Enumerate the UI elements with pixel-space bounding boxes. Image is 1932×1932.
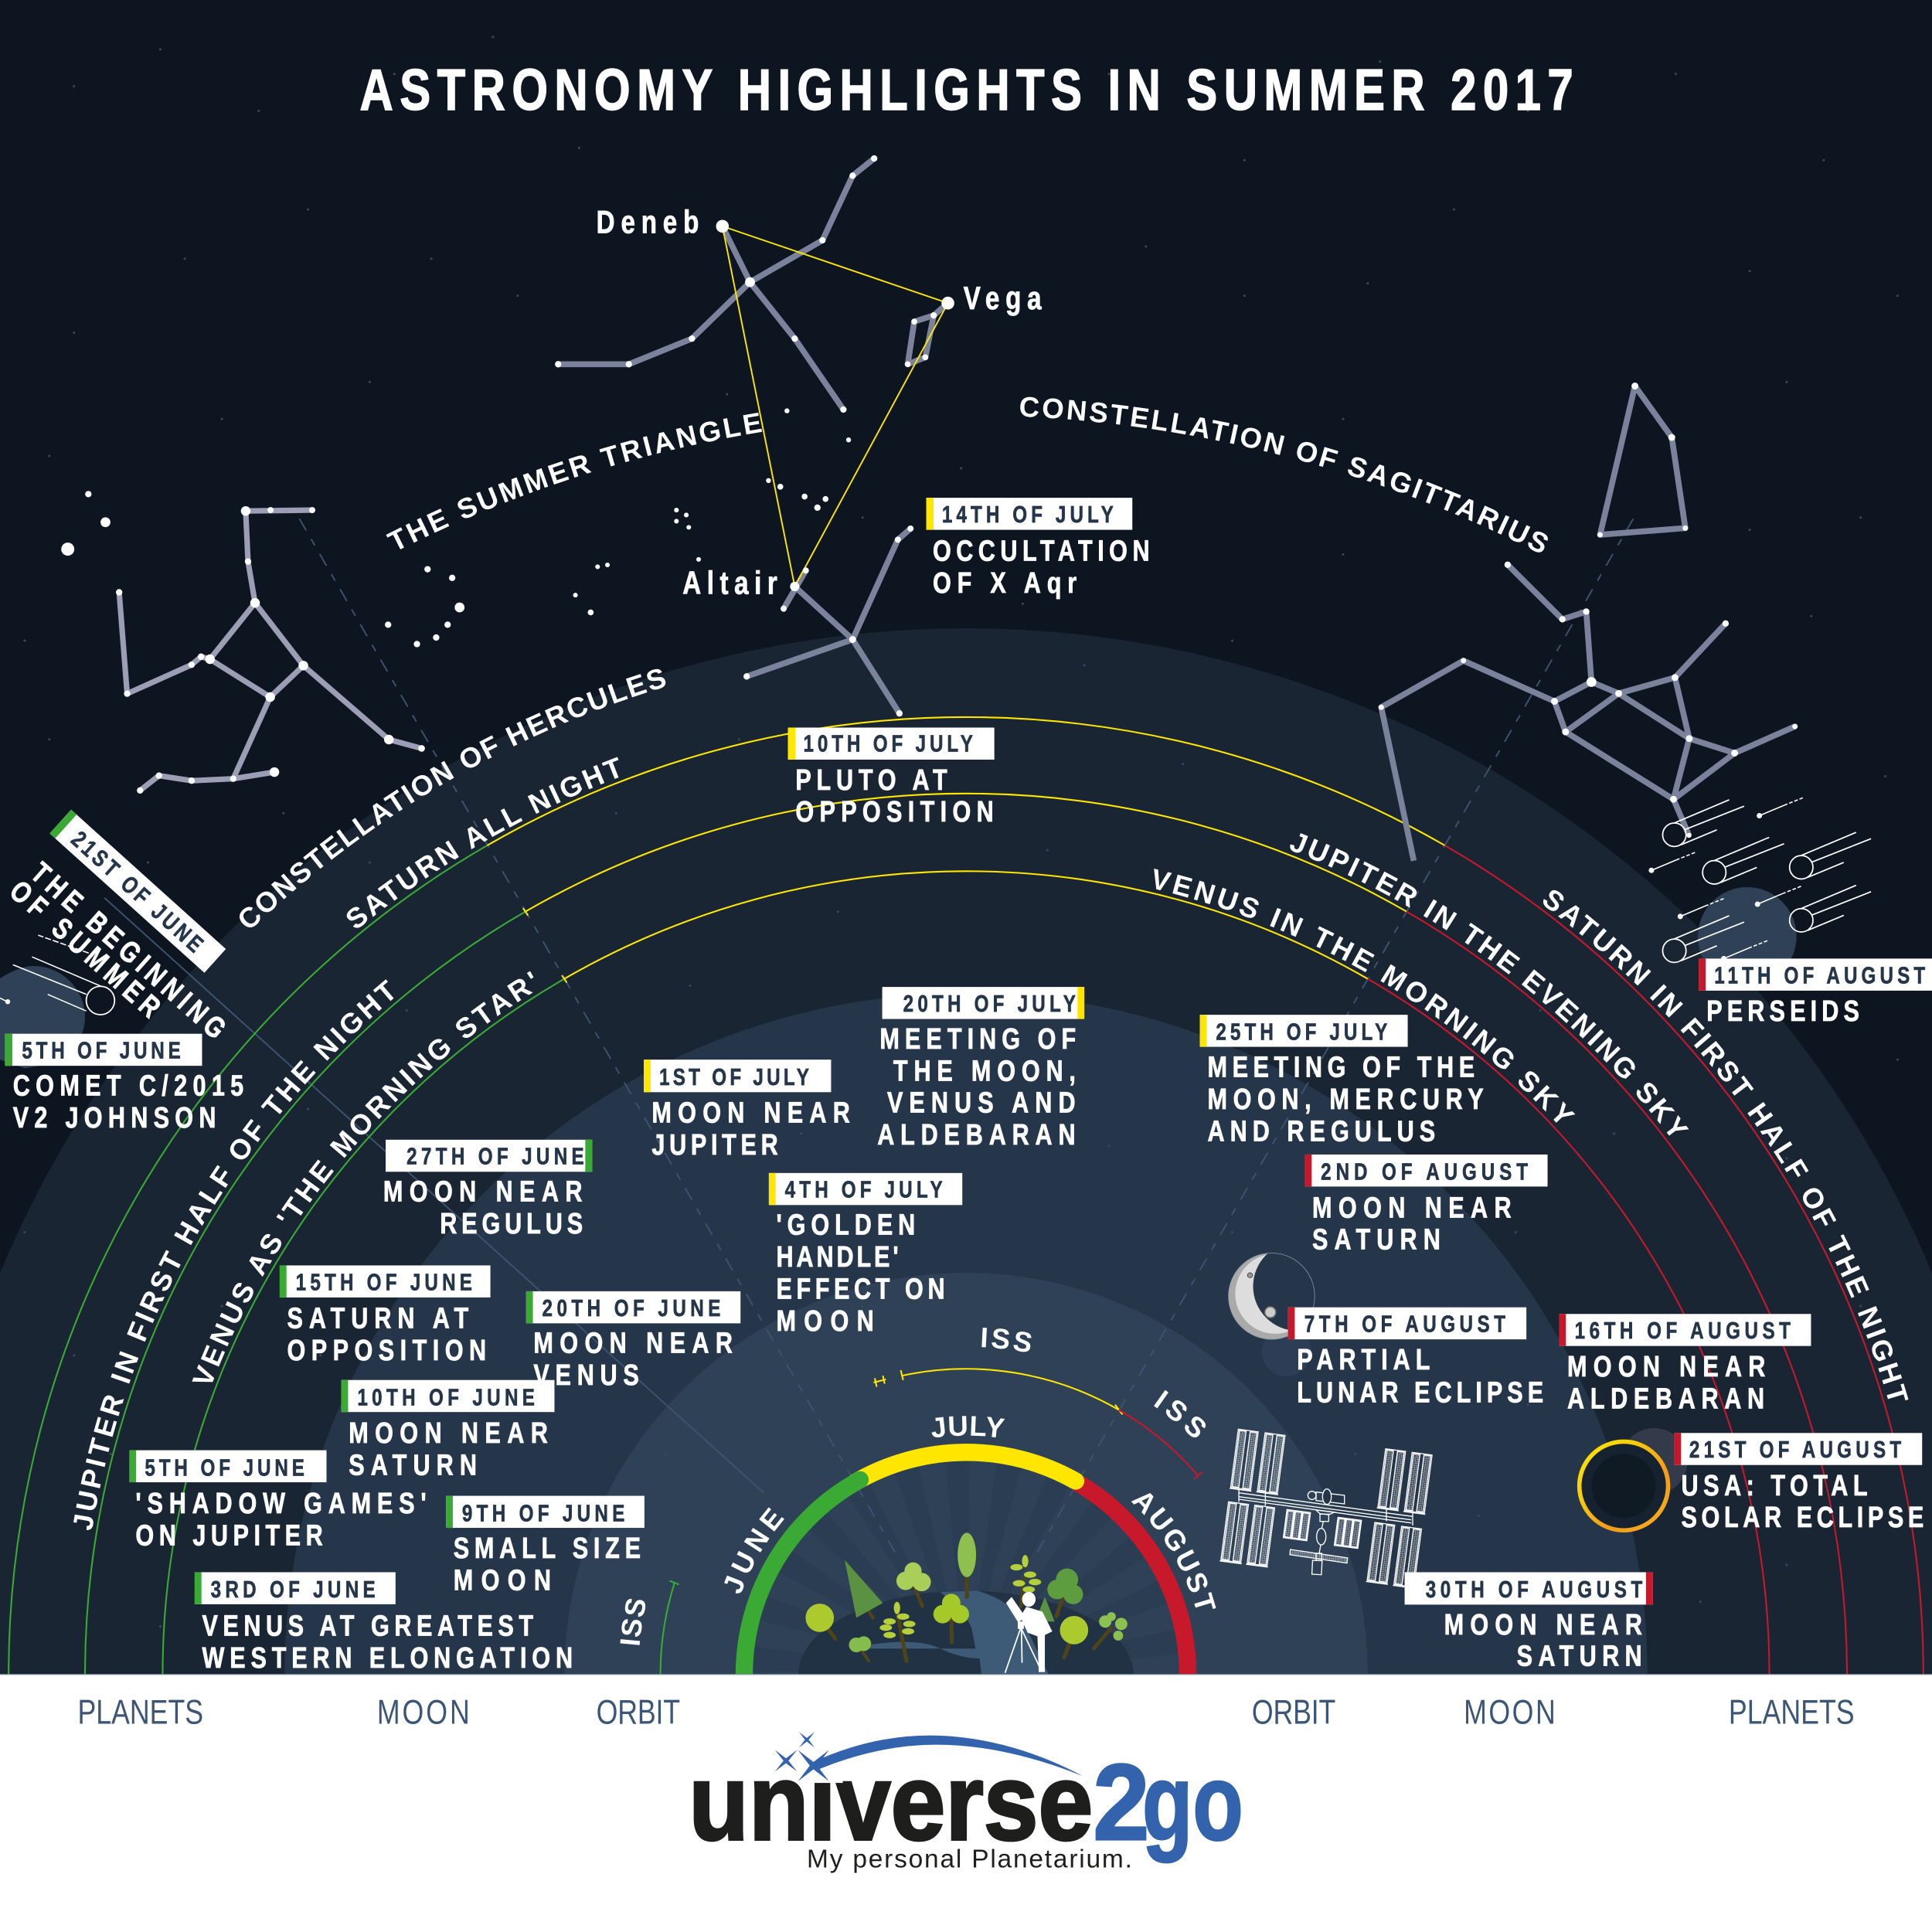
event: 2nd of August: 2ND OF AUGUST — [1321, 1158, 1528, 1185]
event: 20th of July: THE MOON, — [893, 1055, 1076, 1087]
event: 21st of August: SOLAR ECLIPSE — [1682, 1502, 1923, 1534]
event: 10th of June: 10TH OF JUNE — [357, 1384, 535, 1410]
event: 4th of July: 'GOLDEN — [776, 1209, 915, 1241]
International Space Station — [1219, 1429, 1433, 1588]
event: 5th of June Jupiter: 5TH OF JUNE — [145, 1454, 304, 1481]
event: 5th of June comet: COMET C/2015 — [13, 1070, 243, 1102]
event: 4th of July: MOON — [776, 1305, 874, 1338]
ISS orbit track — [661, 1369, 1202, 1675]
month label: June: JUNE — [724, 1507, 784, 1594]
event: 10th of June — [342, 1380, 554, 1481]
event: 9th of June: SMALL SIZE — [454, 1532, 641, 1565]
lunar eclipse moon — [1229, 1242, 1342, 1376]
curved label: Saturn all night: SATURN ALL NIGHT — [346, 757, 618, 928]
comet C/2015 illustration — [0, 935, 114, 1068]
event: 21st of August: USA: TOTAL — [1682, 1470, 1868, 1502]
event: 10th of June: MOON NEAR — [349, 1417, 548, 1450]
event: 15th of June: 15TH OF JUNE — [296, 1269, 472, 1295]
event: 25th of July: AND REGULUS — [1208, 1115, 1435, 1148]
event: 7th of August: LUNAR ECLIPSE — [1297, 1376, 1543, 1409]
event: 1st of July — [644, 1060, 850, 1162]
event: 7th of August — [1288, 1308, 1543, 1409]
curved heading: constellation of Sagittarius: CONSTELLATION OF SAGITTARIUS — [1020, 397, 1548, 553]
event: 3rd of June: VENUS AT GREATEST — [202, 1610, 533, 1642]
event: 10th of July: 10TH OF JULY — [804, 730, 973, 757]
event: 30th of August: MOON NEAR — [1444, 1609, 1642, 1641]
constellation: Hercules — [61, 491, 464, 794]
event: 20th of June — [526, 1291, 740, 1392]
white footer panel — [0, 1675, 1932, 1932]
event: 15th of June: SATURN AT — [287, 1303, 468, 1335]
star label: Vega: Vega — [964, 281, 1043, 316]
axis label: orbit right: ORBIT — [1252, 1692, 1335, 1731]
event: 3rd of June — [195, 1572, 573, 1675]
event: 30th of August: 30TH OF AUGUST — [1426, 1576, 1643, 1602]
axis label: planets right: PLANETS — [1729, 1692, 1855, 1731]
event: 9th of June: 9TH OF JUNE — [462, 1500, 624, 1526]
event: 5th of June Jupiter: 'SHADOW GAMES' — [135, 1488, 427, 1520]
event: 21st of June: THE BEGINNING — [24, 856, 232, 1046]
event: 1st of July: MOON NEAR — [651, 1097, 850, 1129]
event: 16th of August: MOON NEAR — [1567, 1351, 1765, 1383]
curved label: Venus in the morning sky: VENUS IN THE MORNING SKY — [1154, 869, 1575, 1123]
event: 25th of July: 25TH OF JULY — [1216, 1019, 1387, 1045]
event: 21st of June: OF SUMMER — [3, 875, 166, 1024]
event: 20th of June: 20TH OF JUNE — [543, 1294, 720, 1321]
event: 10th of July: OPPOSITION — [795, 796, 994, 828]
event: 21st of June: 21ST OF JUNE — [66, 825, 209, 957]
event: 3rd of June: WESTERN ELONGATION — [202, 1642, 573, 1675]
event: 9th of June — [446, 1496, 645, 1597]
event: 16th of August: 16TH OF AUGUST — [1575, 1317, 1791, 1344]
event: 11th of August: PERSEIDS — [1706, 995, 1859, 1028]
event: 16th of August — [1560, 1314, 1811, 1415]
landscape with trees and observer — [798, 1532, 1134, 1758]
logo: universe2go: go — [1142, 1741, 1243, 1862]
orbit label: ISS top: ISS — [981, 1328, 1031, 1352]
logo: universe2go: My personal Planetarium. — [807, 1845, 1132, 1874]
planet track: middle — [85, 794, 1847, 1675]
axis label: planets left: PLANETS — [77, 1692, 203, 1731]
logo: universe2go — [689, 1732, 1243, 1874]
event: 20th of July: 20TH OF JULY — [903, 990, 1076, 1017]
event: 5th of June comet: V2 JOHNSON — [13, 1102, 216, 1134]
month label: August: AUGUST — [1131, 1493, 1216, 1609]
event: 7th of August: PARTIAL — [1297, 1344, 1430, 1376]
radial rays behind the horizon — [859, 1568, 1073, 1781]
month ring — [744, 1452, 1188, 1675]
event: 21st of August: 21ST OF AUGUST — [1689, 1437, 1901, 1463]
event: 21st of August — [1674, 1433, 1923, 1534]
event: 4th of July: EFFECT ON — [776, 1273, 945, 1305]
logo: universe2go: universe — [689, 1741, 1093, 1862]
event: 14th of July: 14TH OF JULY — [942, 501, 1114, 528]
orbit label: ISS left: ISS — [620, 1598, 646, 1645]
event: 27th of June: 27TH OF JUNE — [406, 1143, 584, 1169]
footer rule — [0, 1674, 1932, 1675]
event: 7th of August: 7TH OF AUGUST — [1304, 1311, 1505, 1337]
event: 25th of July — [1200, 1015, 1484, 1148]
event: 1st of July: JUPITER — [651, 1129, 778, 1162]
curved label: Jupiter in first half of the night: JUPITER IN FIRST HALF OF THE NIGHT — [73, 979, 394, 1530]
curved label: Saturn in first half of the night: SATURN IN FIRST HALF OF THE NIGHT — [1543, 890, 1909, 1400]
constellation: Summer Triangle / Cygnus, Lyra, Aquila — [555, 155, 954, 716]
background stars — [25, 37, 1898, 1627]
axis label: moon right: MOON — [1464, 1692, 1556, 1731]
event: 20th of July: ALDEBARAN — [877, 1119, 1076, 1151]
axis label: moon left: MOON — [377, 1692, 470, 1731]
event: 27th of June — [383, 1140, 592, 1240]
solar eclipse — [1580, 1428, 1688, 1530]
inner sky band: orbit — [564, 1273, 1368, 1675]
planet track: inner — [162, 871, 1770, 1675]
event: 4th of July — [769, 1173, 962, 1338]
event: 14th of July: OF X Aqr — [933, 567, 1077, 600]
event: 2nd of August: SATURN — [1312, 1224, 1440, 1257]
event: 5th of June comet — [5, 1034, 243, 1134]
curved heading: constellation of Hercules: CONSTELLATION OF HERCULES — [240, 669, 666, 927]
event: 4th of July: HANDLE' — [776, 1241, 899, 1274]
event: 20th of July: VENUS AND — [887, 1087, 1076, 1120]
event: 10th of July — [788, 727, 995, 828]
dashed divider: July to August — [1035, 519, 1633, 1556]
event: 15th of June — [280, 1265, 491, 1367]
event: 20th of June: VENUS — [533, 1359, 639, 1392]
month label: July: JULY — [931, 1416, 1005, 1437]
event: 14th of July — [927, 498, 1150, 600]
event: 11th of August: 11TH OF AUGUST — [1714, 962, 1925, 988]
curved label: Jupiter in the evening sky: JUPITER IN THE EVENING SKY — [1290, 833, 1689, 1136]
event: 20th of July — [877, 987, 1084, 1151]
event: 5th of June Jupiter: ON JUPITER — [135, 1519, 323, 1552]
event: 27th of June: MOON NEAR — [383, 1175, 583, 1208]
event: 15th of June: OPPOSITION — [287, 1335, 486, 1367]
event: 20th of June: MOON NEAR — [533, 1328, 733, 1359]
event: 11th of August — [1699, 958, 1932, 1028]
event: 10th of June: SATURN — [349, 1449, 477, 1481]
event: 2nd of August: MOON NEAR — [1312, 1192, 1512, 1224]
constellation: Sagittarius — [1379, 383, 1798, 861]
event: 4th of July: 4TH OF JULY — [785, 1176, 943, 1202]
event: 14th of July: OCCULTATION — [933, 535, 1150, 567]
event: 16th of August: ALDEBARAN — [1567, 1383, 1764, 1415]
event: 27th of June: REGULUS — [440, 1208, 583, 1240]
event: 9th of June: MOON — [454, 1564, 551, 1597]
dashed divider: June to July — [299, 519, 900, 1560]
event: 20th of July: MEETING OF — [879, 1023, 1076, 1056]
curved label: Venus as the morning star: VENUS AS 'THE MORNING STAR' — [192, 971, 533, 1382]
event: 3rd of June: 3RD OF JUNE — [211, 1577, 376, 1603]
event: 1st of July: 1ST OF JULY — [659, 1063, 809, 1090]
planet track: outer — [9, 717, 1923, 1675]
star label: Deneb: Deneb — [597, 204, 699, 240]
outer sky band: planets — [0, 628, 1932, 1675]
Perseids meteor shower illustration — [1649, 798, 1871, 986]
event: 2nd of August — [1304, 1155, 1548, 1257]
radial date divider: 21st of June — [104, 898, 764, 1493]
middle sky band: moon — [284, 993, 1648, 1675]
title: ASTRONOMY HIGHLIGHTS IN SUMMER 2017 — [360, 59, 1573, 122]
event: 10th of July: PLUTO AT — [795, 764, 947, 797]
event: 25th of July: MEETING OF THE — [1208, 1051, 1475, 1083]
event: 5th of June comet: 5TH OF JUNE — [22, 1037, 181, 1063]
event: 30th of August: SATURN — [1517, 1640, 1642, 1672]
curved heading: the Summer Triangle: THE SUMMER TRIANGLE — [386, 413, 762, 549]
event: 30th of August — [1405, 1572, 1653, 1672]
event: 5th of June Jupiter — [129, 1451, 427, 1552]
event: 25th of July: MOON, MERCURY — [1208, 1083, 1484, 1116]
star label: Altair: Altair — [682, 565, 777, 600]
orbit label: ISS right: ISS — [1154, 1389, 1206, 1437]
logo: universe2go: 2 — [1093, 1741, 1150, 1862]
axis label: orbit left: ORBIT — [597, 1692, 680, 1731]
